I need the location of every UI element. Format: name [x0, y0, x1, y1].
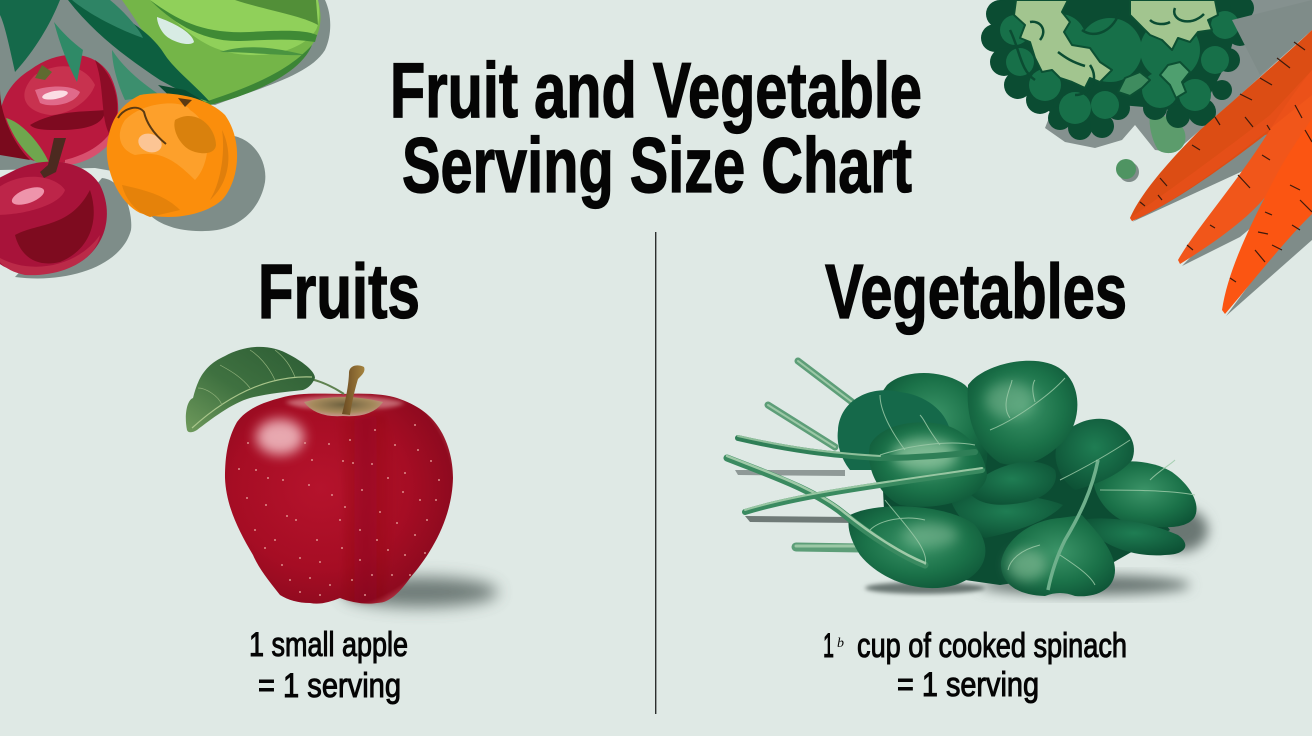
caption: spinach serving: = 1 serving: [897, 666, 1039, 704]
kale pale patches: [1014, 0, 1218, 98]
pointed leaf over apple: [54, 22, 83, 82]
kale leaves: [981, 0, 1254, 140]
caption: spinach serving: cup of cooked spinach: [857, 627, 1127, 665]
kale dark silhouette: [981, 0, 1254, 140]
fruit shadows: [0, 0, 330, 278]
caption: apple serving: [249, 626, 408, 705]
apple stem: [342, 365, 364, 415]
front leaf stem: [1048, 460, 1098, 590]
leaf veins: [870, 378, 1195, 585]
leaf rear main: [838, 390, 950, 470]
apple highlight: [256, 419, 304, 455]
kale shadow: [1045, 0, 1312, 152]
illustration: apple: [186, 347, 498, 607]
kale mid greens: [1000, 11, 1239, 124]
apple speckles: [238, 424, 440, 596]
carrot two: [1178, 70, 1312, 264]
leaf middle: [968, 462, 1056, 505]
caption: spinach serving: 1: [823, 627, 834, 665]
carrot shadows: [1132, 0, 1312, 316]
spinach dark mass: [880, 395, 1170, 585]
title: Fruit and Vegetable: [390, 46, 922, 134]
apple body: [225, 394, 453, 604]
stems behind: [768, 361, 862, 548]
carrot shading: [1130, 70, 1312, 221]
bottom red apple: [0, 162, 107, 275]
carrot three: [1222, 118, 1312, 314]
apple leaf: [186, 347, 315, 432]
apple shading: [335, 415, 396, 603]
caption: spinach serving: b: [837, 636, 844, 651]
pale kale fragment: [1149, 112, 1185, 153]
top red apple: [0, 55, 118, 165]
leaf back: [880, 373, 988, 470]
orange: [107, 93, 237, 217]
leaf bottom right: [1083, 518, 1185, 555]
pea: [1116, 159, 1139, 182]
apple top rim: [285, 396, 405, 410]
leaf middle low: [950, 494, 1063, 538]
leaf back right: [1093, 461, 1197, 527]
caption: apple serving: = 1 serving: [258, 667, 401, 705]
illustration: spinach: [727, 361, 1208, 596]
small leaf on apple: [6, 118, 50, 165]
centre divider: [655, 232, 656, 714]
spinach shadows: [735, 470, 1208, 595]
leaf lower left: [848, 506, 985, 588]
leaf right middle: [1056, 419, 1134, 490]
caption: apple serving: 1 small apple: [249, 626, 408, 664]
carrot one: [1130, 30, 1312, 221]
leaf main front: [869, 422, 987, 507]
front leaf highlight: [1007, 549, 1047, 581]
apple stem: [40, 138, 66, 178]
leaf stalk: [305, 378, 344, 394]
caption: spinach serving: [823, 627, 1127, 704]
front stems: [727, 436, 982, 565]
green pear: [122, 0, 320, 105]
leaf front: [1001, 515, 1115, 596]
leaf top: [968, 361, 1077, 465]
title: [390, 46, 922, 209]
leaves: [0, 0, 210, 106]
title: Serving Size Chart: [402, 121, 912, 209]
heading: fruits: Fruits: [258, 249, 420, 335]
apple shadow: [342, 577, 498, 607]
carrot markings: [1140, 42, 1312, 282]
heading: vegetables: Vegetables: [825, 249, 1127, 335]
leaf highlights: [893, 382, 1035, 547]
apple cavity: [304, 397, 383, 416]
illustration: kale and carrots top right: [981, 0, 1312, 316]
illustration: fruit cluster top left: [0, 0, 330, 278]
